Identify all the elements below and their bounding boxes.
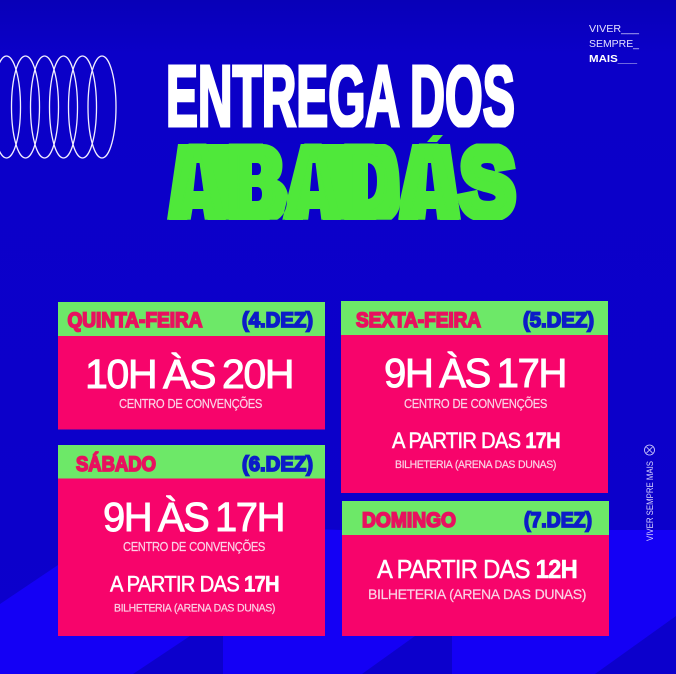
day label: sexta-feira: SEXTA-FEIRA: [356, 309, 481, 332]
date: 4 dez: (4.DEZ): [242, 309, 313, 332]
title: ABADÁS: D: [344, 127, 394, 237]
day label: domingo: DOMINGO: [362, 509, 456, 532]
title: ABADÁS: S: [460, 127, 515, 237]
title: ABADÁS: A: [288, 127, 338, 237]
title: ENTREGA DOS: [168, 64, 514, 128]
title: ABADÁS: A: [172, 127, 222, 237]
day label: sábado: SÁBADO: [76, 453, 156, 476]
date: 7 dez: (7.DEZ): [524, 509, 592, 532]
ticket office location: BILHETERIA (ARENA DAS DUNAS): [368, 587, 586, 602]
side label: Viver Sempre Mais: VIVER SEMPRE MAIS: [645, 461, 655, 541]
icon: circled logo mark: [644, 445, 654, 455]
icon: overlapping white ellipses: [0, 56, 116, 158]
panel: sexta-feira: [341, 301, 608, 493]
day label: quinta-feira: QUINTA-FEIRA: [68, 309, 202, 332]
logo: Viver Sempre Mais: MAIS___: [589, 54, 638, 65]
location: CENTRO DE CONVENÇÕES: [404, 396, 547, 411]
panel: quinta-feira: [58, 302, 325, 430]
location: CENTRO DE CONVENÇÕES: [119, 396, 262, 411]
title: ENTREGA DOS: DOS: [410, 48, 515, 145]
hours: 9H ÀS 17H: [384, 350, 566, 396]
logo: Viver Sempre Mais: [589, 24, 639, 65]
title: ABADÁS: [167, 135, 516, 220]
date: 6 dez: (6.DEZ): [242, 453, 313, 476]
title: ABADÁS: Á: [402, 127, 456, 237]
logo: Viver Sempre Mais: SEMPRE_: [589, 39, 639, 50]
ticket office location: BILHETERIA (ARENA DAS DUNAS): [114, 602, 275, 614]
hours: 10H ÀS 20H: [85, 351, 293, 397]
ticket office time: A PARTIR DAS 12H: [377, 554, 577, 584]
ticket office time: A PARTIR DAS 17H: [110, 572, 279, 596]
title: ENTREGA DOS: ENTREGA: [166, 48, 400, 145]
location: CENTRO DE CONVENÇÕES: [123, 539, 265, 554]
date: 5 dez: (5.DEZ): [523, 309, 594, 332]
ticket office time: A PARTIR DAS 17H: [392, 428, 560, 453]
hours: 9H ÀS 17H: [103, 494, 284, 540]
title: ABADÁS: B: [228, 127, 283, 237]
logo: Viver Sempre Mais: VIVER___: [589, 24, 639, 35]
panel: domingo: [342, 501, 609, 636]
ticket office location: BILHETERIA (ARENA DAS DUNAS): [395, 459, 556, 471]
panel: sábado: [58, 445, 325, 636]
